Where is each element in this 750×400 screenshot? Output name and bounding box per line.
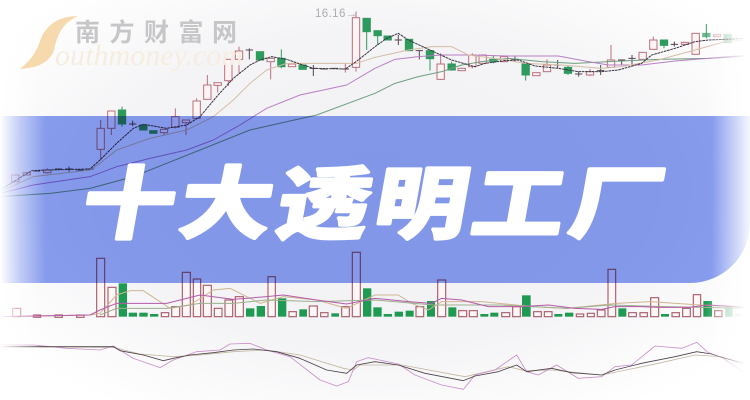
candlesticks: rising <box>12 12 721 182</box>
line: volume MA tan <box>0 288 750 317</box>
icon: orange swoosh <box>20 16 78 69</box>
moving average lines <box>0 33 750 197</box>
line: MA60 green <box>0 56 750 197</box>
line: indicator black <box>0 347 750 381</box>
line: volume MA pink <box>0 295 750 317</box>
line: indicator tan <box>0 347 750 377</box>
brand url: outhmoney.com <box>55 39 243 72</box>
candlesticks: doji <box>33 35 678 172</box>
line: MA20 purple <box>0 55 750 193</box>
volume bars: falling <box>119 283 750 317</box>
line: MA10 tan <box>0 40 750 192</box>
candlesticks: falling <box>118 18 731 133</box>
volume average lines <box>0 288 750 317</box>
title: 十大透明工厂 <box>75 161 671 249</box>
volume bars: rising <box>13 252 722 317</box>
band fade left/right <box>0 0 40 400</box>
lower indicator lines <box>0 342 750 389</box>
brand name: 南方财富网 <box>75 18 237 47</box>
line: MA5 black <box>0 33 750 190</box>
blue banner <box>0 116 750 283</box>
line: volume MA green <box>100 300 750 315</box>
price label: 16.16→ <box>315 8 358 20</box>
line: indicator pink <box>0 342 750 389</box>
